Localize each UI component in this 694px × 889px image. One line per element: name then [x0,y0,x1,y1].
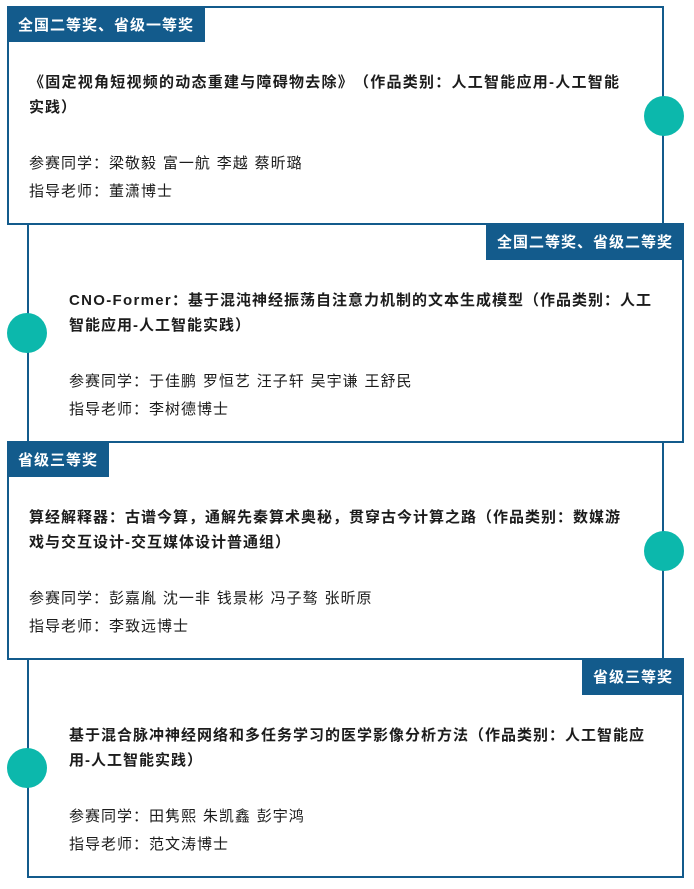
award 4 project title: 基于混合脉冲神经网络和多任务学习的医学影像分析方法（作品类别：人工智能应 [69,727,645,744]
award 4 tag [582,658,684,695]
award 2 advisor: 指导老师：李树德博士 [69,401,229,418]
panel: award 3 [7,441,664,660]
award 1 project title [29,74,620,116]
award 3 tag: 省级三等奖 [18,452,98,469]
award 1 students: 参赛同学：梁敬毅 富一航 李越 蔡昕璐 [29,155,303,172]
award 1 project title: 实践） [29,99,77,116]
award 3 tag [7,441,109,477]
panel: award 1 [7,6,664,225]
award 3 students: 参赛同学：彭嘉胤 沈一非 钱景彬 冯子骜 张昕原 [29,590,372,607]
award 2 students: 参赛同学：于佳鹏 罗恒艺 汪子轩 吴宇谦 王舒民 [69,373,412,390]
award 1 marker [644,96,684,136]
award 4 marker [7,748,47,788]
award 1 tag [7,6,205,42]
award 2 project title: 智能应用-人工智能实践） [69,317,251,334]
award 2 tag: 全国二等奖、省级二等奖 [497,234,673,251]
award 2 tag [486,223,684,260]
award 2 project title [69,292,652,334]
award 4 project title: 用-人工智能实践） [69,752,203,769]
award 2 marker [7,313,47,353]
award 1 advisor: 指导老师：董潇博士 [29,183,173,200]
award 4 students: 参赛同学：田隽熙 朱凯鑫 彭宇鸿 [69,808,305,825]
award 3 project title: 算经解释器：古谱今算，通解先秦算术奥秘，贯穿古今计算之路（作品类别：数媒游 [29,509,621,526]
award 3 project title [29,509,621,551]
award 4 project title [69,727,645,769]
panel: award 2 [27,223,684,443]
award 3 marker [644,531,684,571]
award 3 project title: 戏与交互设计-交互媒体设计普通组） [29,534,291,551]
panel: award 4 [27,658,684,878]
award 1 tag: 全国二等奖、省级一等奖 [18,17,194,34]
award 3 advisor: 指导老师：李致远博士 [29,618,189,635]
award 1 project title: 《固定视角短视频的动态重建与障碍物去除》（作品类别：人工智能应用-人工智能 [29,74,620,91]
award 4 advisor: 指导老师：范文涛博士 [69,836,229,853]
award 2 project title: CNO-Former：基于混沌神经振荡自注意力机制的文本生成模型（作品类别：人工 [69,292,652,309]
award 4 tag: 省级三等奖 [593,669,673,686]
